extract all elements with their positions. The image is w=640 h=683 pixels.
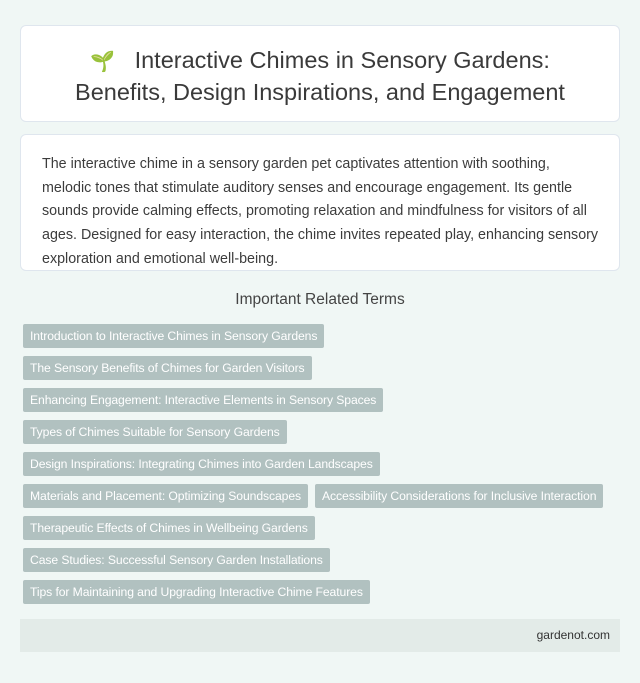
tag list: Materials and Placement: Optimizing Soundscapes — [30, 489, 301, 503]
tag list — [23, 324, 603, 604]
description text — [20, 134, 620, 271]
tag list: Types of Chimes Suitable for Sensory Gardens — [30, 425, 280, 439]
footer — [20, 619, 620, 652]
tag list: Introduction to Interactive Chimes in Sensory Gardens — [30, 329, 317, 343]
header: Benefits, Design Inspirations, and Engagement — [75, 79, 565, 105]
footer: gardenot.com — [537, 628, 610, 642]
tag list: Case Studies: Successful Sensory Garden Installations — [30, 553, 323, 567]
tag list: Design Inspirations: Integrating Chimes into Garden Landscapes — [30, 457, 373, 471]
header: 🌱 Interactive Chimes in Sensory Gardens: — [90, 47, 550, 73]
header — [20, 25, 620, 122]
description text: melodic tones that stimulate auditory senses and encourage engagement. Its gentle — [42, 180, 572, 196]
tag list: The Sensory Benefits of Chimes for Garden Visitors — [30, 361, 305, 375]
description text: sounds provide calming effects, promoting relaxation and mindfulness for visitors of all — [42, 203, 587, 219]
tag list: Accessibility Considerations for Inclusive Interaction — [322, 489, 596, 503]
description text: ages. Designed for easy interaction, the chime invites repeated play, enhancing sensory — [42, 227, 598, 243]
section heading: Important Related Terms — [235, 291, 405, 308]
tag list: Enhancing Engagement: Interactive Elements in Sensory Spaces — [30, 393, 376, 407]
tag list: Tips for Maintaining and Upgrading Interactive Chime Features — [30, 585, 363, 599]
description text: exploration and emotional well-being. — [42, 251, 278, 267]
description text: The interactive chime in a sensory garden pet captivates attention with soothing, — [42, 156, 550, 172]
tag list: Therapeutic Effects of Chimes in Wellbeing Gardens — [30, 521, 308, 535]
